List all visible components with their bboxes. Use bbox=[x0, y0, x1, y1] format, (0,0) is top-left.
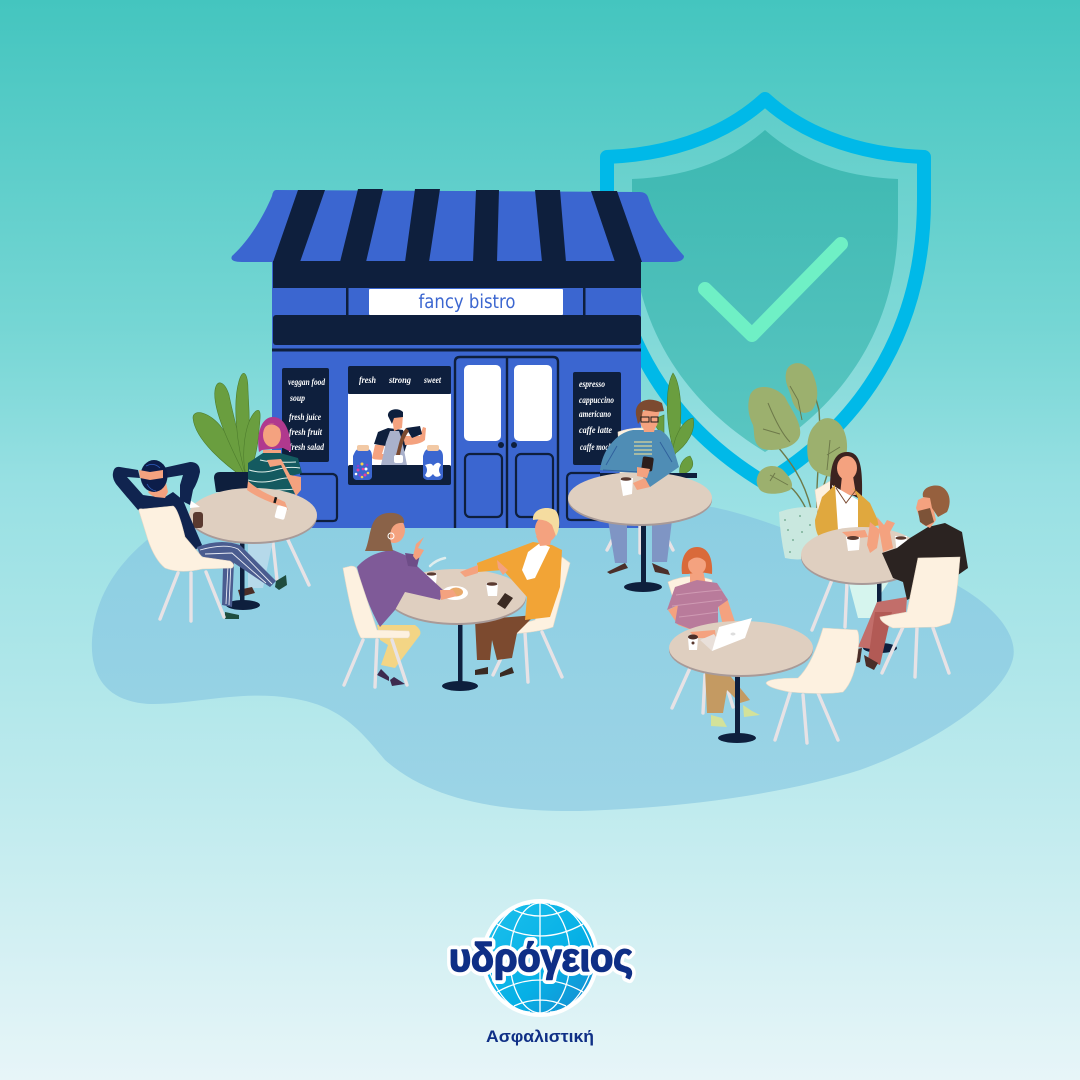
woman's chair legs bbox=[273, 540, 309, 585]
woman's forearm with cup bbox=[247, 481, 288, 520]
blond man's chair bbox=[493, 557, 570, 682]
man's chair bbox=[139, 506, 234, 621]
pot bbox=[779, 507, 820, 559]
blond man's trousers and shoes bbox=[475, 615, 535, 677]
chair behind bbox=[607, 428, 673, 553]
right chalkboard menu: americano bbox=[579, 409, 611, 419]
bistro shop bbox=[231, 189, 684, 528]
blond man bbox=[460, 508, 562, 620]
centre table group: man in blue sweater bbox=[568, 400, 712, 592]
navy chair rail bbox=[600, 473, 697, 478]
right chalkboard menu: cappuccino bbox=[579, 395, 614, 405]
double door bbox=[455, 357, 558, 528]
left table group: woman with pink hair and relaxed man bbox=[113, 417, 317, 621]
plant stems bbox=[770, 385, 833, 513]
shop sign bbox=[369, 289, 563, 315]
globe bbox=[481, 899, 599, 1017]
table post and base bbox=[624, 522, 662, 592]
wordmark: υδρόγειος bbox=[449, 936, 633, 980]
table top bbox=[669, 621, 813, 677]
barista bbox=[372, 409, 426, 465]
lower side panels bbox=[300, 473, 600, 521]
table top bbox=[801, 527, 923, 585]
striped trousers bbox=[197, 542, 276, 607]
bearded man's chair bbox=[880, 557, 960, 677]
right chalkboard menu: caffe latte bbox=[579, 425, 612, 435]
green plant left bbox=[193, 373, 260, 480]
tagline: Ασφαλιστική bbox=[486, 1027, 594, 1046]
cookie jar bbox=[423, 445, 443, 480]
woman with pink hair bbox=[248, 417, 302, 496]
left chalkboard menu: fresh juice bbox=[289, 412, 321, 422]
shop body bbox=[272, 262, 641, 528]
woman's chair bbox=[812, 480, 847, 630]
purple woman's trousers and shoes bbox=[377, 625, 420, 686]
service window with barista: sweet bbox=[423, 375, 441, 385]
table post and base bbox=[226, 540, 260, 610]
takeaway cup bbox=[688, 634, 698, 650]
striped awning bbox=[231, 189, 684, 262]
shop sign: fancy bistro bbox=[418, 292, 516, 313]
navy fascia bbox=[273, 261, 641, 288]
service window with barista bbox=[348, 366, 451, 485]
bearded man bbox=[852, 485, 968, 670]
left chalkboard menu: fresh salad bbox=[289, 442, 324, 452]
woman's legs bbox=[238, 540, 273, 597]
green plant right bbox=[652, 373, 694, 475]
right chalkboard menu bbox=[573, 372, 621, 465]
woman with long hair bbox=[815, 452, 880, 542]
left chalkboard menu: soup bbox=[289, 393, 305, 403]
wordmark: υδρόγειος bbox=[449, 936, 633, 980]
hands and coffee bbox=[842, 522, 907, 555]
right chalkboard menu: espresso bbox=[579, 379, 605, 389]
front chair bbox=[766, 628, 859, 743]
table top bbox=[568, 472, 712, 526]
table top bbox=[189, 488, 317, 544]
shield with check mark bbox=[607, 99, 924, 483]
left chalkboard menu: veggan food bbox=[288, 377, 325, 387]
plant leaves bbox=[748, 363, 847, 494]
table post and base bbox=[718, 672, 756, 743]
leaf veins bbox=[763, 386, 840, 485]
woman's legs bbox=[848, 580, 890, 618]
brown mug bbox=[190, 500, 203, 528]
front table group: woman with laptop bbox=[667, 547, 859, 743]
left chalkboard menu bbox=[282, 368, 329, 462]
man in blue bbox=[600, 400, 679, 496]
shoes bbox=[607, 563, 670, 575]
dark chair behind woman bbox=[214, 472, 250, 492]
chair behind her bbox=[668, 576, 733, 713]
relaxed man, hands behind head bbox=[113, 460, 287, 619]
coffee cups, plate and phone bbox=[426, 558, 513, 609]
trousers bbox=[705, 670, 750, 713]
shoes bbox=[711, 705, 760, 727]
woman in purple bbox=[357, 513, 457, 627]
middle table group: woman in purple and blond man bbox=[343, 508, 570, 691]
table post and base bbox=[863, 580, 897, 653]
trousers bbox=[608, 520, 672, 563]
woman's chair bbox=[343, 566, 410, 687]
company logo bbox=[449, 899, 633, 1046]
woman with red hair bbox=[667, 547, 735, 635]
hand and laptop bbox=[690, 618, 752, 651]
service window with barista: fresh bbox=[359, 375, 376, 385]
service window with barista: strong bbox=[388, 375, 411, 385]
candy jar bbox=[353, 445, 372, 480]
right chalkboard menu: caffe mocha bbox=[580, 442, 616, 452]
floor blob bbox=[92, 495, 1014, 811]
table top bbox=[388, 569, 526, 625]
navy band bbox=[273, 315, 641, 345]
right table group: woman in cardigan and bearded man bbox=[801, 452, 968, 677]
table post and base bbox=[442, 622, 478, 691]
olive plant in pot bbox=[748, 363, 847, 559]
left chalkboard menu: fresh fruit bbox=[289, 427, 322, 437]
